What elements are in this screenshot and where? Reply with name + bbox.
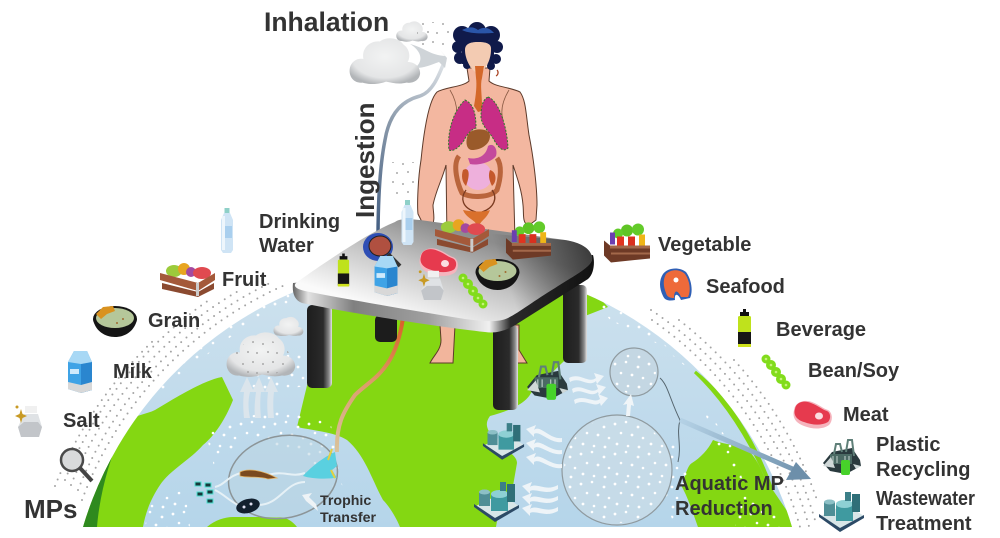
label: milk: Milk	[113, 361, 153, 383]
icon: bean	[762, 354, 790, 390]
left lung	[449, 100, 476, 151]
large cloud	[227, 332, 295, 377]
right leg	[563, 285, 587, 363]
earring	[496, 70, 498, 76]
ureters	[463, 190, 495, 212]
ocean	[83, 263, 792, 527]
up arrow	[623, 394, 634, 416]
item: salt	[418, 270, 444, 300]
evaporation arrows	[240, 377, 278, 418]
land: left continent	[83, 377, 233, 527]
inner organs	[464, 162, 492, 190]
table	[293, 219, 594, 410]
label: MPs: MPs	[24, 494, 77, 524]
label: salt: Salt	[63, 410, 100, 432]
small circle particles	[612, 350, 656, 394]
aquatic MP reduction	[474, 348, 811, 525]
label: meat: Meat	[843, 404, 889, 426]
floating particles in ocean	[127, 290, 790, 527]
label: drinking water: Water	[259, 235, 314, 257]
item: beverage	[338, 254, 349, 286]
wisps	[410, 44, 447, 68]
trachea	[474, 66, 485, 112]
table items	[338, 200, 551, 308]
land: lower left island	[207, 517, 297, 527]
table top	[295, 219, 592, 321]
icon: plastic recycling	[823, 440, 861, 475]
trophic arrow	[302, 493, 318, 511]
ellipse	[221, 425, 345, 529]
torso and arms	[418, 68, 537, 240]
icon: beverage	[738, 309, 751, 347]
small cloud	[396, 21, 428, 42]
label: aquatic MP reduction: Reduction	[675, 498, 773, 520]
shoulder straps	[450, 90, 509, 120]
connector line	[660, 378, 680, 462]
icon: wastewater treatment	[819, 492, 864, 532]
icon: meat	[793, 401, 832, 428]
food icons right	[604, 224, 864, 532]
icon: grain	[93, 306, 137, 337]
land masses	[83, 285, 800, 530]
heading: ingestion: Ingestion	[350, 102, 380, 218]
label: wastewater treatment: Treatment	[876, 513, 972, 535]
recycling plant on globe	[527, 362, 568, 400]
item: meat	[419, 248, 458, 276]
particles above table	[390, 162, 414, 200]
item: bean	[458, 274, 488, 308]
face	[465, 42, 491, 73]
icon: vegetable	[604, 224, 650, 262]
shrimp	[240, 470, 277, 479]
large circle	[562, 415, 672, 525]
cloud particles	[234, 340, 290, 376]
label: trophic transfer: Trophic	[320, 493, 371, 509]
kidneys	[462, 169, 496, 186]
fish	[303, 449, 337, 479]
label: fruit: Fruit	[222, 269, 267, 291]
hair	[452, 22, 503, 70]
front leg	[493, 325, 518, 410]
mussel	[235, 496, 261, 516]
heading: inhalation: Inhalation	[264, 7, 389, 37]
icon: fruit	[160, 263, 215, 297]
trophic transfer food web	[195, 425, 345, 529]
land: central continent	[297, 285, 608, 527]
wastewater plant bottom	[474, 482, 519, 522]
flow lines	[215, 472, 305, 505]
icon: salt	[15, 406, 42, 437]
left leg	[307, 305, 332, 388]
flow arrows to wastewater bottom	[522, 482, 558, 516]
icon: magnifier	[61, 449, 92, 481]
dotted particle arcs	[55, 283, 817, 530]
label: beverage: Beverage	[776, 319, 866, 341]
wastewater plant top	[483, 423, 524, 460]
label: aquatic MP reduction: Aquatic MP	[675, 473, 784, 495]
rain cloud	[227, 317, 303, 418]
label: trophic transfer: Transfer	[320, 510, 376, 526]
item: bowl	[476, 259, 520, 290]
label: grain: Grain	[148, 310, 200, 332]
back leg	[375, 315, 397, 342]
label: wastewater treatment: Wastewater	[876, 488, 975, 510]
label: plastic recycling: Plastic	[876, 434, 940, 456]
small cloud	[274, 317, 303, 336]
large cloud	[350, 38, 420, 84]
stomach	[468, 145, 497, 165]
icon: drinking water	[221, 208, 233, 253]
item: bottle	[402, 200, 414, 245]
icon: milk	[68, 351, 92, 393]
blue output arrow	[680, 420, 811, 480]
right lung	[481, 97, 508, 150]
item: fruit crate	[435, 219, 489, 253]
label: vegetable: Vegetable	[658, 234, 751, 256]
inhalation clouds	[350, 21, 447, 84]
label: seafood: Seafood	[706, 276, 785, 298]
heart and liver	[466, 129, 490, 150]
label: bean/soy: Bean/Soy	[808, 360, 900, 382]
airborne particles by head	[417, 22, 449, 46]
food icons left	[15, 208, 233, 481]
flow arrows to recycling	[569, 373, 608, 406]
grey ingestion curve	[378, 60, 445, 240]
large circle particles	[564, 417, 670, 523]
globe	[83, 292, 792, 527]
label: drinking water: Drinking	[259, 211, 340, 233]
flow arrows to wastewater top	[526, 425, 562, 468]
item: vegetable crate	[506, 221, 551, 260]
large intestine	[456, 156, 500, 196]
hair highlights	[462, 27, 494, 33]
label: plastic recycling: Recycling	[876, 459, 970, 481]
icon: seafood	[660, 268, 692, 301]
item: milk	[375, 256, 397, 296]
land: dark green rim	[83, 457, 112, 527]
table edge	[293, 255, 594, 333]
land: right rim	[695, 372, 772, 490]
orange arrow	[337, 303, 415, 452]
item: seafood magnified	[363, 233, 400, 266]
human body	[418, 22, 537, 363]
land: right continent	[682, 440, 800, 530]
legs and feet	[430, 325, 527, 363]
table shading	[470, 232, 592, 318]
small circle	[610, 348, 658, 396]
plankton	[195, 482, 213, 503]
bladder	[463, 210, 490, 224]
